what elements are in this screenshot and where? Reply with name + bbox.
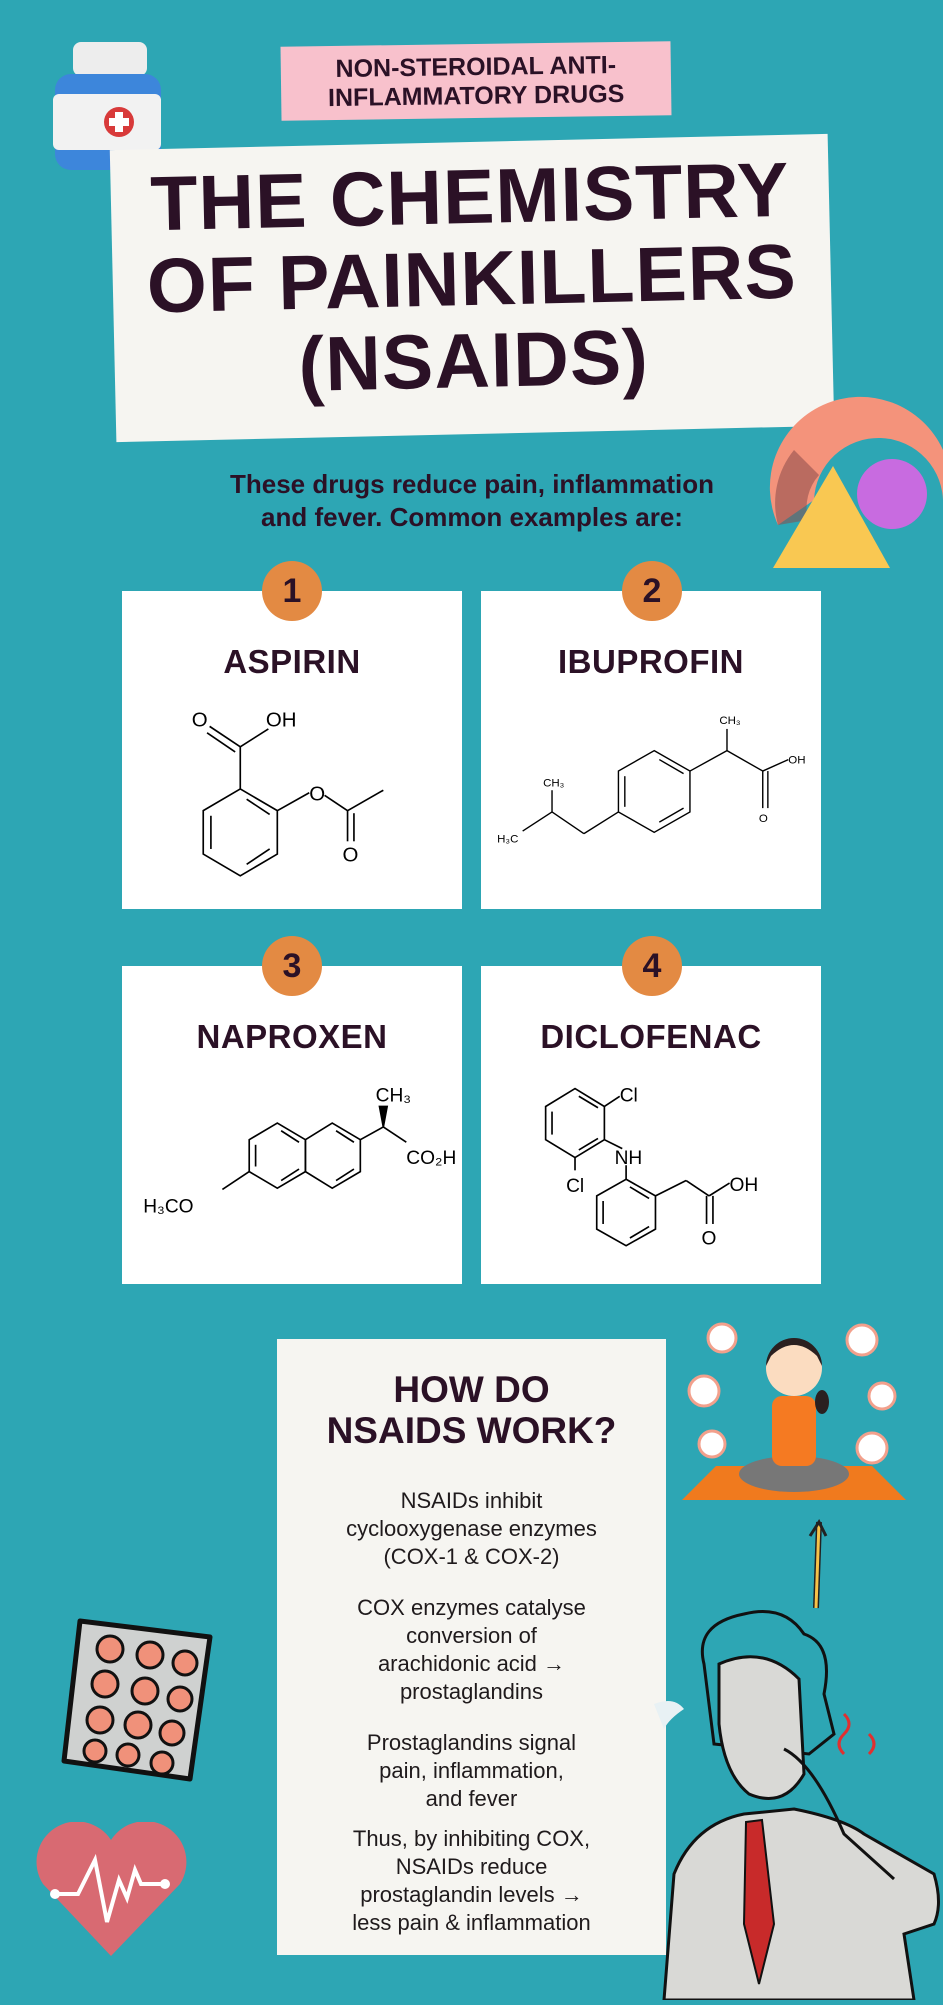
text: step 4: less pain & inflammation [352, 1910, 591, 1935]
icon: heart with pulse [36, 1822, 186, 1956]
title panel [110, 134, 834, 442]
text: step 1: NSAIDs inhibit [401, 1488, 542, 1513]
number 3: 3 [283, 947, 301, 985]
text: step 2 [357, 1595, 586, 1704]
heading: how do NSAIDs work [327, 1369, 616, 1451]
number 2 [622, 561, 682, 621]
molecule: aspirin: O [342, 845, 358, 867]
title [146, 147, 798, 408]
icon: man in pain [654, 1610, 940, 2000]
molecule: aspirin: O [309, 783, 325, 805]
molecule: aspirin: O [192, 709, 208, 731]
text: step 2: conversion of [406, 1623, 537, 1648]
title: (NSAIDS) [298, 314, 650, 408]
molecule: diclofenac: Cl [620, 1085, 638, 1106]
heading: how do NSAIDs work: HOW DO [393, 1369, 550, 1410]
text: step 3: Prostaglandins signal [367, 1730, 576, 1755]
heading: how do NSAIDs work: NSAIDS WORK? [327, 1410, 616, 1451]
intro text [230, 469, 714, 532]
icon: relaxed woman meditating [682, 1322, 906, 1500]
text: step 2: prostaglandins [400, 1679, 543, 1704]
molecule: ibuprofen: H₃C [497, 834, 518, 846]
card 4: diclofenac [481, 966, 821, 1284]
icon: pill blister pack [62, 1618, 212, 1782]
molecule: naproxen [143, 1085, 456, 1217]
panel: how do NSAIDs work [277, 1339, 666, 1955]
text: step 2: arachidonic acid → [378, 1651, 565, 1676]
molecule: diclofenac: NH [615, 1148, 642, 1169]
molecule: diclofenac: OH [730, 1175, 758, 1196]
label: pink subtitle tag [281, 41, 671, 121]
number 2: 2 [643, 572, 661, 610]
text: step 1: cyclooxygenase enzymes [346, 1516, 597, 1541]
molecule: naproxen: CO₂H [406, 1148, 456, 1169]
text: step 4: NSAIDs reduce [396, 1854, 547, 1879]
heading: diclofenac: DICLOFENAC [540, 1018, 762, 1055]
molecule: naproxen: CH₃ [376, 1085, 411, 1106]
text: step 2: COX enzymes catalyse [357, 1595, 586, 1620]
text: step 4 [352, 1826, 591, 1935]
title: THE CHEMISTRY [150, 147, 790, 247]
number 4: 4 [643, 947, 661, 985]
text: step 3: pain, inflammation, [379, 1758, 564, 1783]
title: OF PAINKILLERS [146, 229, 798, 329]
intro text: These drugs reduce pain, inflammation [230, 469, 714, 499]
card 1: aspirin [122, 591, 462, 909]
number 4 [622, 936, 682, 996]
intro text: and fever. Common examples are: [261, 502, 683, 532]
molecule: diclofenac: Cl [566, 1176, 584, 1197]
decorative shapes [770, 396, 943, 568]
card 3: naproxen [122, 966, 462, 1284]
molecule: ibuprofen: CH₃ [543, 777, 565, 789]
text: step 1: (COX-1 & COX-2) [383, 1544, 560, 1569]
molecule: naproxen: H₃CO [143, 1196, 194, 1217]
molecule: ibuprofen: CH₃ [719, 715, 741, 727]
text: step 4: prostaglandin levels → [360, 1882, 583, 1907]
molecule: ibuprofen [497, 715, 806, 846]
molecule: ibuprofen: OH [788, 754, 806, 766]
text: step 4: Thus, by inhibiting COX, [353, 1826, 590, 1851]
molecule: aspirin: OH [266, 709, 296, 731]
number 1 [262, 561, 322, 621]
label: pink subtitle tag: NON-STEROIDAL ANTI- [335, 51, 616, 83]
heading: aspirin: ASPIRIN [223, 643, 361, 680]
molecule: diclofenac: O [701, 1228, 716, 1249]
molecule: aspirin [192, 709, 384, 877]
molecule: diclofenac [544, 1085, 758, 1249]
text: step 3: and fever [426, 1786, 517, 1811]
label: pink subtitle tag: INFLAMMATORY DRUGS [328, 80, 625, 112]
icon: medicine jar [53, 42, 161, 170]
arrow: up from man to woman [808, 1519, 828, 1608]
text: step 1 [346, 1488, 597, 1569]
card 2: ibuprofen [481, 591, 821, 909]
heading: naproxen: NAPROXEN [196, 1018, 388, 1055]
text: step 3 [367, 1730, 576, 1811]
number 3 [262, 936, 322, 996]
number 1: 1 [283, 572, 301, 610]
heading: ibuprofen: IBUPROFIN [558, 643, 744, 680]
molecule: ibuprofen: O [759, 813, 768, 825]
